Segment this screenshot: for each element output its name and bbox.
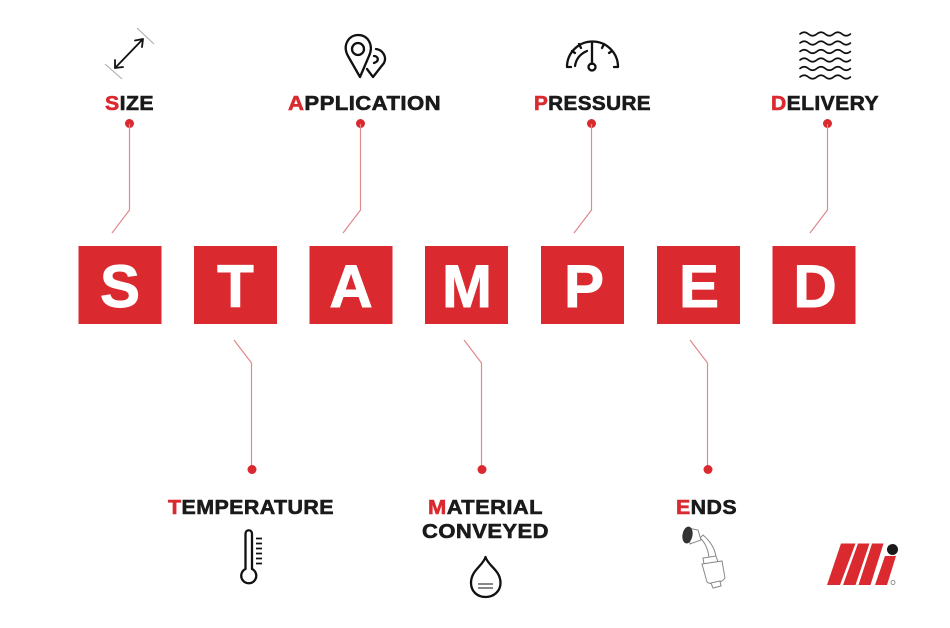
- label: ends: ENDS: [676, 496, 737, 519]
- connector: temperature: [234, 340, 256, 474]
- letter block: S: S: [100, 253, 140, 320]
- letter block: A: [310, 246, 392, 324]
- icon: thermometer: [241, 530, 262, 583]
- label: temperature: TEMPERATURE: [168, 496, 334, 519]
- icon: hose end fitting: [682, 526, 725, 588]
- icon: liquid drop: [471, 557, 500, 597]
- letter block: M: [425, 246, 508, 324]
- letter block: E: E: [679, 253, 719, 320]
- label: delivery: DELIVERY: [771, 92, 879, 115]
- letter block: T: [194, 246, 277, 324]
- letter block: E: [657, 246, 740, 324]
- label: material conveyed: MATERIAL: [428, 496, 543, 519]
- letter block: S: [78, 246, 162, 324]
- icon: delivery waves: [800, 32, 850, 79]
- label: pressure: PRESSURE: [534, 92, 651, 115]
- icon: application map pins: [346, 35, 385, 77]
- connector: ends: [690, 340, 712, 474]
- letter block: P: P: [564, 253, 604, 320]
- letter block: A: A: [329, 253, 373, 320]
- icon: size arrow: [105, 28, 154, 79]
- connector: pressure: [574, 119, 596, 233]
- letter block: M: M: [442, 253, 492, 320]
- letter block: T: T: [217, 253, 254, 320]
- letter block: D: D: [793, 253, 837, 320]
- label: material conveyed: [422, 496, 549, 543]
- letter block: D: [772, 246, 856, 324]
- logo: Mi: [827, 544, 898, 585]
- connector: material conveyed: [464, 340, 486, 474]
- connector: delivery: [810, 119, 832, 233]
- connector: application: [343, 119, 365, 233]
- label: size: SIZE: [105, 92, 154, 115]
- letter block: P: [541, 246, 624, 324]
- icon: pressure gauge: [567, 42, 618, 70]
- label: application: APPLICATION: [288, 92, 441, 115]
- label: material conveyed: CONVEYED: [422, 520, 549, 543]
- connector: size: [112, 119, 134, 233]
